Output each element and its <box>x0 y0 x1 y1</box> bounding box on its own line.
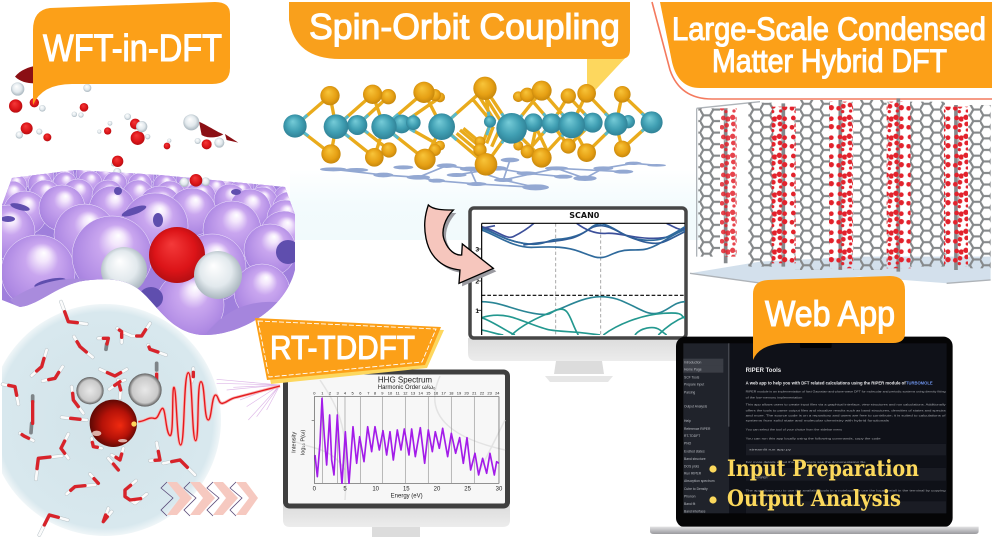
background: pale blue floor band <box>290 170 700 240</box>
HHG chart <box>291 375 503 500</box>
app sidebar: Band structure <box>684 457 706 461</box>
app main page: systems from solid state and molecular chemistry with hybrid functionals <box>746 419 890 423</box>
chevron arrows <box>161 482 258 516</box>
HHG chart: 7 <box>367 391 370 396</box>
central molecule <box>76 373 162 447</box>
HHG chart: 12 <box>403 391 408 396</box>
app sidebar: Excited states <box>684 449 705 453</box>
heading: Web App: Web App <box>765 293 895 334</box>
heading: WFT-in-DFT <box>33 2 230 105</box>
HHG chart: 30 <box>496 486 503 492</box>
HHG chart: Harmonic Order ω/ω₀ <box>378 385 436 391</box>
app sidebar: Prepare Input <box>684 383 704 387</box>
panel: Spin-Orbit Coupling <box>283 2 666 190</box>
app main page: of the low-memory implementation <box>746 395 803 399</box>
crystal structure render <box>690 98 991 284</box>
app main page: the commands shown below <box>746 493 804 497</box>
app sidebar: Introduction <box>684 361 702 365</box>
HHG chart: HHG Spectrum <box>378 375 432 384</box>
HHG chart: 0 <box>313 486 317 492</box>
feature bullets: Input Preparation <box>727 456 919 482</box>
HHG chart: 1 <box>321 391 324 396</box>
HHG chart: 14 <box>418 391 424 396</box>
app sidebar: Output Analysis <box>684 404 707 408</box>
HHG chart: 15 <box>403 486 410 492</box>
HHG chart: Intensity <box>291 432 297 453</box>
band structure chart <box>475 211 685 335</box>
HHG chart: 5 <box>352 391 355 396</box>
HHG chart: 0 <box>313 391 316 396</box>
monitor chin <box>283 505 510 527</box>
HHG chart: 2 <box>329 391 332 396</box>
HHG chart: 10 <box>388 391 393 396</box>
HHG chart: log₁₀ P(ω) <box>301 430 307 455</box>
app sidebar: Band fit <box>684 502 695 506</box>
HHG chart: 6 <box>359 391 362 396</box>
app main page: TURBOMOLE <box>906 381 933 386</box>
solvent sphere <box>0 304 221 536</box>
HHG chart: 22 <box>480 391 485 396</box>
HHG chart: 21 <box>472 391 477 396</box>
app sidebar: SCF Tools <box>684 376 700 380</box>
heading: Spin-Orbit Coupling <box>289 2 630 59</box>
app main page: run RIPER <box>753 476 768 480</box>
HHG chart: 13 <box>411 391 416 396</box>
HHG chart: 20 <box>434 486 441 492</box>
laptop base <box>650 527 979 534</box>
panel: Web App laptop <box>650 276 979 534</box>
band structure chart: SCAN0 <box>569 211 600 220</box>
free water molecules and isosurfaces <box>9 66 238 187</box>
app main page: The app allows you to use the available tools in a notebook or use the local install in the terminal by copying <box>746 488 946 492</box>
monitor chin <box>468 338 690 361</box>
feature bullets <box>709 456 919 512</box>
panel: Large-Scale Condensed Matter Hybrid DFT <box>652 2 992 284</box>
app sidebar: Parsing <box>684 390 695 394</box>
heading: Large-Scale Condensed Matter Hybrid DFT: Matter Hybrid DFT <box>712 43 947 79</box>
app main page: and more. The source code is on a repository and users are free to contribute; it is suited to calculations of <box>746 414 946 418</box>
app main page: You can select the tool of your choice from the sidebar menu <box>746 427 843 431</box>
HHG chart: 4 <box>344 391 347 396</box>
app main page: This app allows users to create input files via a graphical interface, view structures and run calculations. Additionally <box>746 403 946 407</box>
app sidebar: Home Page <box>684 368 702 372</box>
app sidebar: Help <box>684 419 691 423</box>
app sidebar: Run RIPER <box>684 472 702 476</box>
monitor stand <box>372 527 420 537</box>
curved pink arrow <box>425 205 496 286</box>
HHG chart: 11 <box>396 391 401 396</box>
heading: RT-TDDFT <box>255 318 444 384</box>
heading: WFT-in-DFT: WFT-in-DFT <box>43 28 222 70</box>
coral outline behind heading <box>652 2 992 99</box>
app main page: RIPER module is an implementation of fast Gaussian-and-plane-wave DFT for molecular and periodic systems using density fitting <box>746 390 946 394</box>
crystal shadow on floor <box>320 158 666 190</box>
band structure chart: 3 <box>475 247 479 254</box>
laptop body <box>676 337 953 527</box>
app sidebar: Cube to Density <box>684 487 708 491</box>
HHG chart: 24 <box>495 391 500 396</box>
app sidebar: RT-TDDFT <box>684 434 700 438</box>
heading: Web App <box>753 276 905 360</box>
metal surface slab <box>2 170 295 335</box>
HHG chart: Energy (eV) <box>391 494 423 500</box>
panel: band structure monitor <box>425 205 690 382</box>
HHG chart: 10 <box>372 486 380 492</box>
app sidebar: Band interface <box>684 510 706 514</box>
heading: Large-Scale Condensed Matter Hybrid DFT <box>660 2 992 88</box>
panel: WFT-in-DFT <box>0 2 308 340</box>
HHG chart: 3 <box>337 391 340 396</box>
HHG chart: 5 <box>343 486 347 492</box>
HHG chart: 17 <box>441 391 447 396</box>
panel: HHG spectrum monitor <box>283 372 510 537</box>
monitor stand <box>545 361 613 382</box>
app main page: For more details about the parameters see the documentation file <box>746 460 866 464</box>
adsorbed water molecule <box>101 227 242 299</box>
water above the surface <box>180 174 210 187</box>
app sidebar: DOS plots <box>684 464 699 468</box>
monitor screen <box>470 208 686 338</box>
app sidebar: Reference RIPER <box>684 427 711 431</box>
laser pulse wave <box>138 373 280 445</box>
app main page: offers the tools to parse output files and visualize results such as band structures, densities of states and spectra <box>746 408 946 412</box>
HHG chart: 25 <box>464 486 472 492</box>
band structure chart: 1 <box>475 308 479 315</box>
app sidebar: Phonon <box>684 494 696 498</box>
app main page: streamlit run app.py <box>749 448 792 452</box>
app main page <box>729 342 947 513</box>
HHG chart: 20 <box>464 391 470 396</box>
band structure chart: 2 <box>475 279 479 286</box>
HHG chart: 8 <box>374 391 377 396</box>
crystal: teal and gold atoms <box>283 77 663 176</box>
HHG chart: 19 <box>457 391 462 396</box>
callout tail <box>587 55 628 99</box>
app main page: A web app to help you with DFT related calculations using the RIPER module of <box>746 381 906 386</box>
HHG chart: 18 <box>449 391 454 396</box>
monitor screen <box>286 372 508 506</box>
solvent water sticks <box>3 302 195 535</box>
app main page: You can run this app locally using the following commands, copy the code <box>746 436 881 440</box>
HHG chart: 9 <box>381 391 384 396</box>
app main page: RIPER Tools <box>746 368 782 374</box>
app sidebar: PNO <box>684 442 692 446</box>
feature bullets: Output Analysis <box>727 486 901 512</box>
laser burst <box>217 379 280 420</box>
HHG chart: 16 <box>434 391 439 396</box>
HHG chart: 23 <box>487 391 493 396</box>
heading: RT-TDDFT: RT-TDDFT <box>270 329 415 366</box>
panel: solvated molecule with laser pulse <box>0 302 280 536</box>
heading: Spin-Orbit Coupling: Spin-Orbit Coupling <box>309 6 620 47</box>
app sidebar <box>683 343 729 514</box>
HHG chart: 15 <box>426 391 431 396</box>
app sidebar: Absorption spectrum <box>684 479 715 483</box>
